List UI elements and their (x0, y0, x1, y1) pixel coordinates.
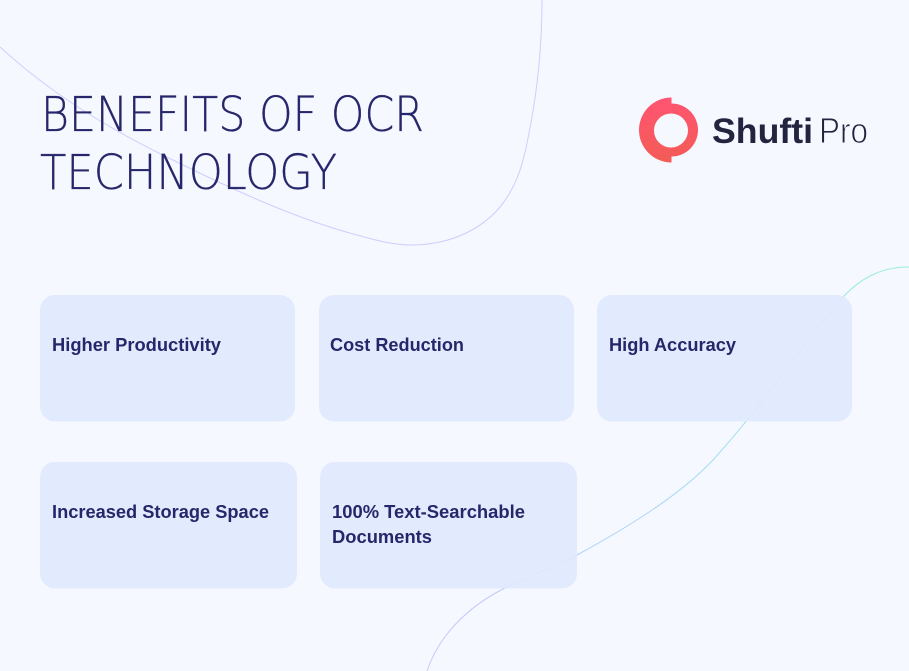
card: Increased Storage Space (40, 462, 297, 588)
title: BENEFITS OF OCR (41, 87, 424, 143)
card: 100% Text-Searchable Documents (320, 462, 577, 588)
card: 100% Text-Searchable Documents: 100% Text-Searchable (332, 502, 525, 522)
card: High Accuracy: High Accuracy (609, 335, 736, 355)
decorative curve: purple (0, 0, 542, 245)
card: Cost Reduction (319, 295, 574, 422)
decorative curve: teal (427, 267, 909, 671)
card: 100% Text-Searchable Documents: Documents (332, 527, 432, 547)
logo wordmark: Pro (819, 110, 868, 151)
card: Higher Productivity: Higher Productivity (52, 335, 221, 355)
logo wordmark (712, 110, 868, 151)
logo wordmark: Shufti (712, 112, 813, 151)
card: High Accuracy (597, 295, 852, 422)
logo: Shufti Pro (639, 98, 868, 162)
card: Higher Productivity (40, 295, 295, 422)
icon: logo ring (639, 98, 698, 162)
title (40, 87, 424, 201)
title: TECHNOLOGY (40, 145, 337, 201)
card: Increased Storage Space: Increased Storage Space (52, 502, 269, 522)
card: Cost Reduction: Cost Reduction (330, 335, 464, 355)
